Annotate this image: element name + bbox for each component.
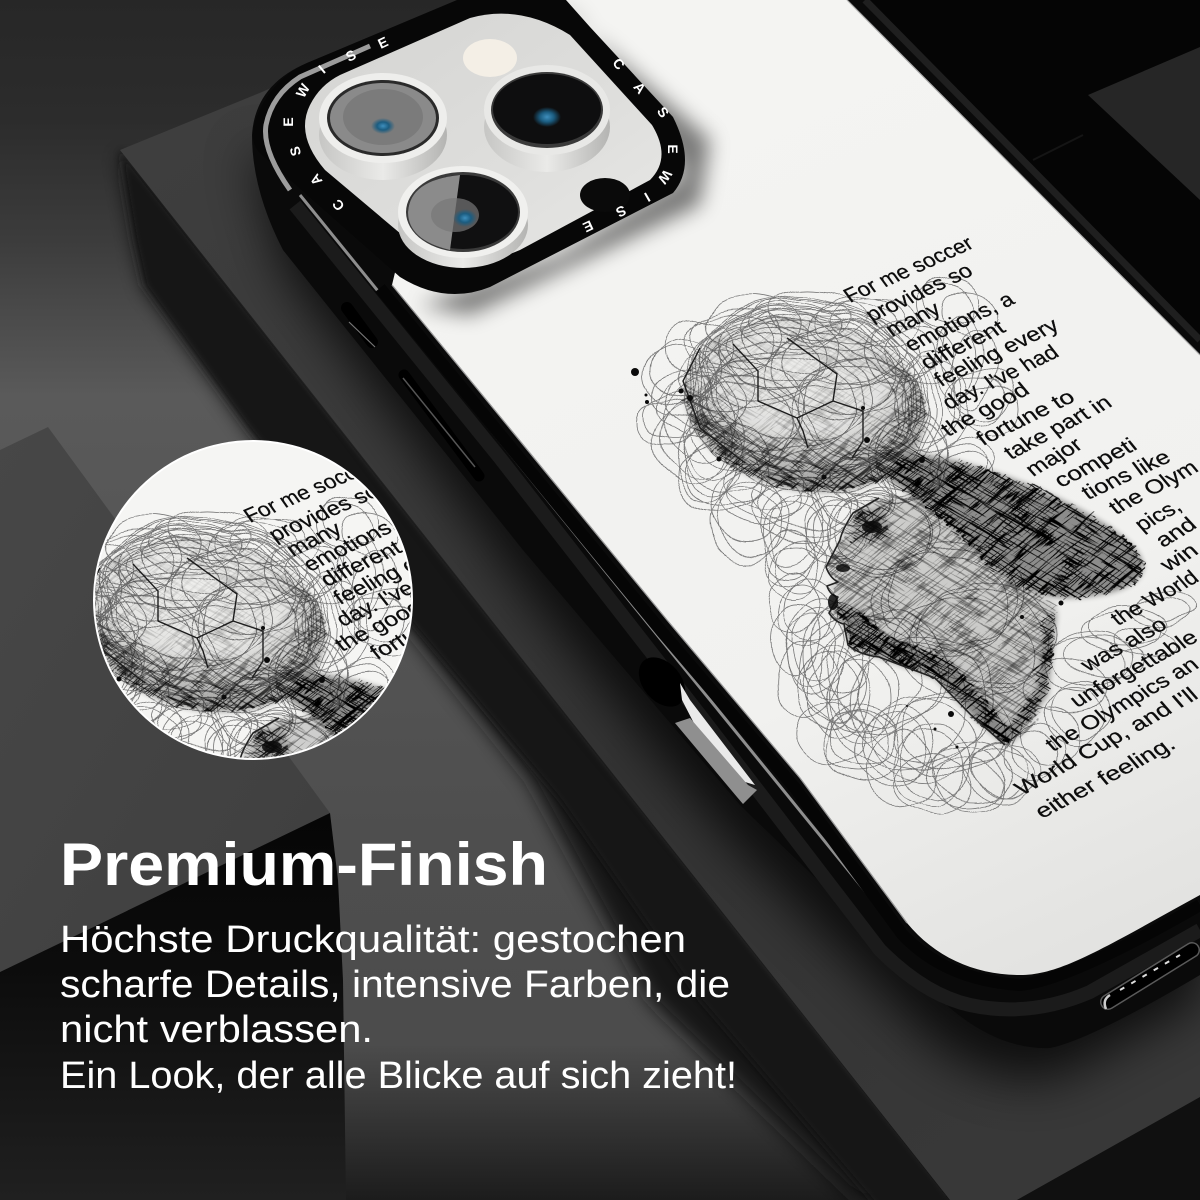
magnified detail circle: [93, 440, 413, 760]
bumper gloss: [266, 46, 370, 190]
camera ring bumper: [253, 0, 685, 294]
icon: side button: [629, 648, 757, 804]
text block printed on the case: take part in: [999, 392, 1117, 464]
CASEWISE ring lettering: E: [280, 117, 296, 127]
text block printed on the case: the good: [936, 379, 1034, 441]
text block printed on the case: many: [881, 298, 946, 341]
text block printed on the case: tions like: [1077, 446, 1175, 504]
icon: silent switch: [347, 308, 375, 347]
magnified detail circle: the good: [331, 596, 427, 656]
scribble artwork: soccer ball and player profile: [631, 276, 1197, 815]
text block printed on the case: and: [1151, 514, 1200, 552]
text block printed on the case: provides so: [861, 260, 977, 326]
magnified detail circle: For me soccer: [240, 455, 379, 527]
body copy: Höchste Druckqualität: gestochen: [60, 919, 686, 961]
text block printed on the case: the Olympics an: [1041, 653, 1200, 756]
text block printed on the case: unforgettable: [1065, 626, 1200, 712]
text block printed on the case: For me soccer: [839, 233, 978, 307]
magnified detail circle: provides so: [264, 480, 384, 546]
text block printed on the case: either feeling.: [1030, 733, 1180, 823]
phone shadow: [250, 150, 1200, 1078]
camera window: [305, 14, 662, 261]
CASEWISE ring lettering: W: [292, 80, 313, 100]
magnified detail circle: fortune to: [366, 600, 469, 664]
CASEWISE ring lettering: [280, 33, 681, 236]
text block printed on the case: pics,: [1130, 495, 1186, 536]
text block printed on the case: different: [916, 317, 1010, 374]
body copy: nicht verblassen.: [60, 1009, 373, 1051]
CASEWISE ring lettering: E: [375, 33, 391, 52]
CASEWISE ring lettering: S: [343, 46, 359, 65]
case side gloss: [295, 205, 1200, 1009]
text block printed on the case: the World: [1106, 567, 1200, 630]
CASEWISE ring lettering: I: [642, 189, 653, 205]
CASEWISE ring lettering: E: [580, 217, 596, 236]
text block printed on the case: major: [1021, 434, 1087, 481]
magnified detail circle: different: [316, 537, 406, 591]
text block printed on the case: competi: [1050, 434, 1142, 492]
CASEWISE ring lettering: C: [329, 196, 348, 214]
CASEWISE ring lettering: A: [630, 79, 649, 97]
CASEWISE ring lettering: S: [654, 104, 672, 121]
CASEWISE ring lettering: C: [609, 55, 628, 73]
magnified detail circle: emotions, a: [299, 506, 419, 576]
icon: charging port: [1105, 950, 1192, 1009]
CASEWISE ring lettering: S: [613, 202, 629, 221]
lens: left: [319, 73, 447, 180]
flash: [463, 39, 517, 77]
CASEWISE ring lettering: S: [286, 145, 304, 158]
heading: Premium-Finish: [60, 831, 548, 898]
CASEWISE ring lettering: I: [315, 62, 328, 77]
lens: bottom: [398, 166, 528, 268]
lens: top right: [484, 65, 610, 172]
icon: volume button: [403, 375, 479, 476]
text block printed on the case: was also: [1075, 614, 1172, 676]
text block printed on the case: emotions, a: [900, 288, 1019, 356]
phone case: [252, 0, 1200, 1048]
text block printed on the case: World Cup, and I'll: [1010, 684, 1200, 800]
lidar sensor: [580, 178, 630, 212]
CASEWISE ring lettering: A: [306, 171, 325, 189]
body copy: Ein Look, der alle Blicke auf sich zieht!: [60, 1055, 737, 1097]
text block printed on the case: fortune to: [972, 386, 1080, 450]
body copy: scharfe Details, intensive Farben, die: [60, 964, 730, 1006]
camera module: [253, 0, 685, 294]
text block printed on the case: [839, 233, 1200, 823]
magnified detail circle: feeling every: [329, 535, 463, 609]
magnified detail circle: many: [282, 518, 347, 561]
text block printed on the case: day. I've had: [938, 341, 1064, 414]
CASEWISE ring lettering: E: [665, 144, 681, 154]
text block printed on the case: the Olym: [1104, 456, 1200, 519]
text block printed on the case: feeling every: [930, 314, 1064, 391]
body copy: [60, 919, 737, 1097]
phone back: white print surface: [392, 0, 1200, 975]
CASEWISE ring lettering: W: [654, 167, 675, 188]
magnified detail circle: day. I've had: [332, 558, 458, 631]
text block printed on the case: win: [1155, 540, 1200, 576]
